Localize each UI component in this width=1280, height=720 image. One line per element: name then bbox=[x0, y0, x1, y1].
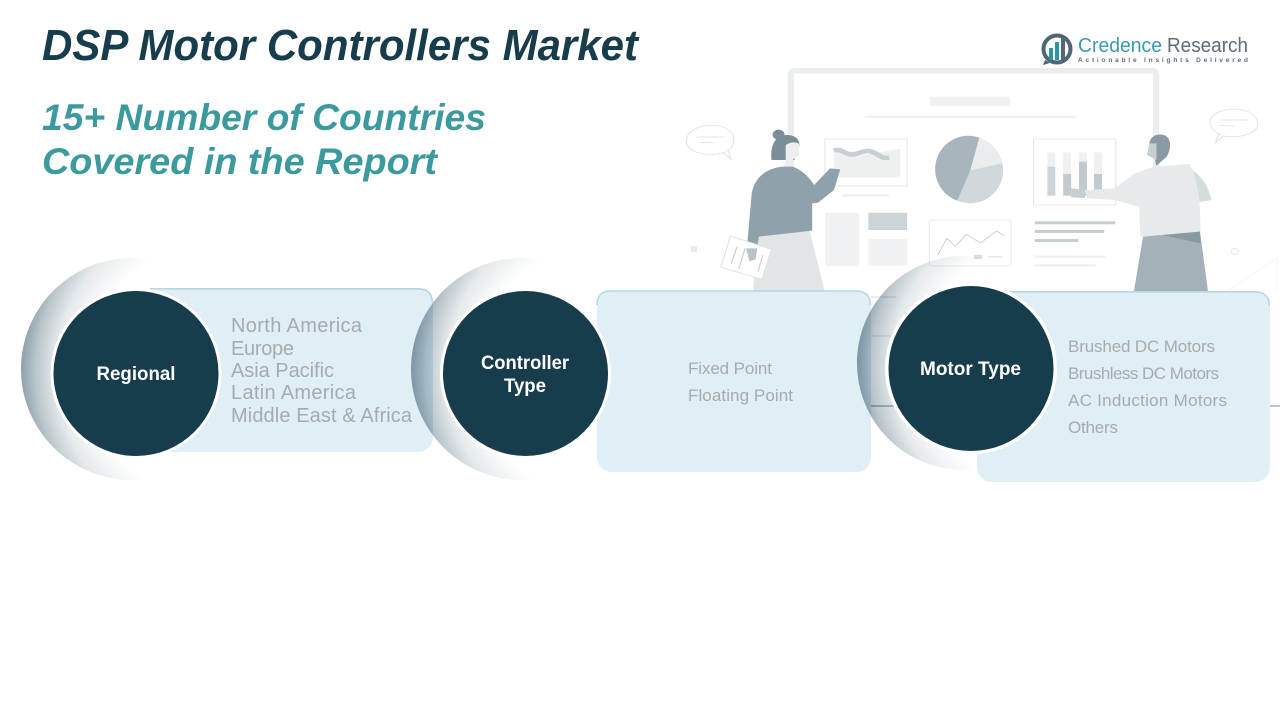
circle: Controller Type bbox=[440, 288, 611, 459]
area chart card bbox=[825, 139, 907, 197]
text block: motor type list bbox=[1068, 337, 1227, 437]
torso and arms bbox=[747, 167, 840, 249]
shirt bbox=[1085, 164, 1200, 237]
text block: regional list: Middle East & Africa bbox=[231, 405, 413, 427]
text lines bbox=[1035, 221, 1115, 266]
face bbox=[1147, 143, 1156, 160]
monitor frame bbox=[791, 71, 1156, 293]
title: DSP Motor Controllers Market bbox=[42, 21, 640, 70]
crescent: controller type bbox=[411, 258, 633, 480]
logo: Credence Research: Actionable Insights Delivered bbox=[1078, 57, 1248, 64]
logo: Credence Research: Credence bbox=[1078, 35, 1162, 57]
circle: Controller Type: Type bbox=[504, 376, 546, 397]
text block: regional list bbox=[231, 315, 413, 427]
panel: motor type bbox=[977, 291, 1270, 482]
woman presenter bbox=[721, 130, 840, 293]
subtitle: 15+ Number of Countries bbox=[42, 97, 486, 138]
hand bbox=[746, 248, 757, 261]
text block: motor type list: AC Induction Motors bbox=[1068, 391, 1227, 410]
hair bbox=[771, 135, 800, 160]
belt shadow bbox=[1162, 232, 1201, 243]
hand bbox=[1071, 188, 1085, 198]
text block: motor type list: Others bbox=[1068, 418, 1118, 437]
illustration: presenters at dashboard screen bbox=[686, 71, 1277, 293]
pants bbox=[1134, 232, 1208, 293]
speech bubble right bbox=[1210, 109, 1258, 143]
text block: regional list: Europe bbox=[231, 338, 294, 360]
circle: Regional: Regional bbox=[96, 364, 176, 385]
bar chart card bbox=[1034, 139, 1116, 205]
background lines behind motor type bbox=[871, 297, 1280, 406]
logo: Credence Research: Research bbox=[1167, 35, 1248, 57]
circle: Motor Type bbox=[885, 282, 1057, 454]
layout blocks bbox=[825, 213, 907, 266]
subtitle: Covered in the Report bbox=[42, 141, 439, 182]
document bbox=[721, 236, 771, 279]
text block: regional list: North America bbox=[231, 315, 363, 337]
circle: Motor Type: Motor Type bbox=[920, 359, 1021, 380]
skirt bbox=[753, 230, 825, 293]
circle: Regional bbox=[50, 288, 222, 459]
crescent: motor type bbox=[857, 256, 1071, 470]
hair bbox=[1149, 135, 1170, 166]
text block: motor type list: Brushed DC Motors bbox=[1068, 337, 1215, 356]
icon: logo mark bbox=[1043, 36, 1070, 65]
face and neck bbox=[783, 142, 799, 168]
subtitle bbox=[42, 97, 486, 182]
text block: controller type list: Fixed Point bbox=[688, 359, 772, 378]
circle: Controller Type: Controller bbox=[481, 353, 570, 374]
back arm bbox=[1188, 167, 1211, 202]
panel: regional bbox=[150, 288, 433, 452]
text block: regional list: Latin America bbox=[231, 382, 357, 404]
pie chart bbox=[935, 136, 1003, 203]
line chart card bbox=[929, 220, 1011, 266]
crescent: regional bbox=[21, 258, 243, 480]
man presenter bbox=[1071, 135, 1211, 293]
text block: controller type list: Floating Point bbox=[688, 386, 793, 405]
panel: controller type bbox=[597, 291, 871, 472]
text block: motor type list: Brushless DC Motors bbox=[1068, 364, 1219, 383]
small decorative dots bbox=[691, 246, 1277, 290]
logo: Credence Research bbox=[1043, 35, 1248, 65]
text block: regional list: Asia Pacific bbox=[231, 360, 334, 382]
text block: controller type list bbox=[688, 359, 793, 405]
screen heading bars bbox=[865, 97, 1076, 118]
speech bubble left bbox=[686, 125, 734, 159]
